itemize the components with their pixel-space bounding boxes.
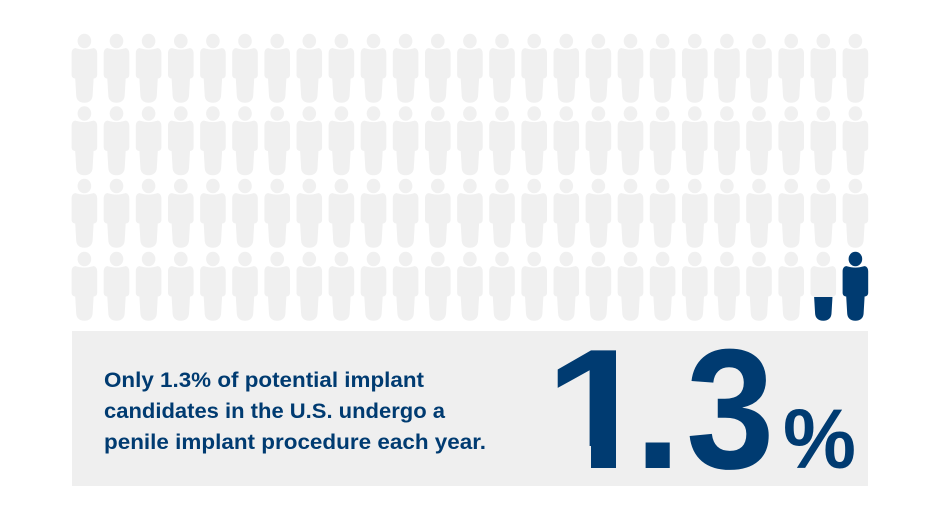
big number: 3	[686, 314, 774, 504]
text block: description: penile implant procedure each year.	[104, 430, 486, 454]
infographic	[72, 34, 868, 486]
text block: description	[104, 368, 486, 454]
people grid	[72, 34, 868, 321]
row 4	[72, 252, 836, 321]
icon: partially filled person	[814, 297, 832, 321]
big number: 1	[544, 313, 652, 505]
icon: fully filled person	[843, 252, 868, 321]
big number: %	[783, 392, 856, 486]
row 3	[72, 179, 868, 248]
text block: description: candidates in the U.S. undergo a	[104, 399, 446, 423]
text block: description: Only 1.3% of potential implant	[104, 368, 424, 392]
row 2	[72, 106, 868, 175]
big number: .	[634, 314, 682, 505]
row 1	[72, 34, 868, 103]
big number	[558, 348, 854, 470]
panel: statistic	[72, 331, 868, 486]
